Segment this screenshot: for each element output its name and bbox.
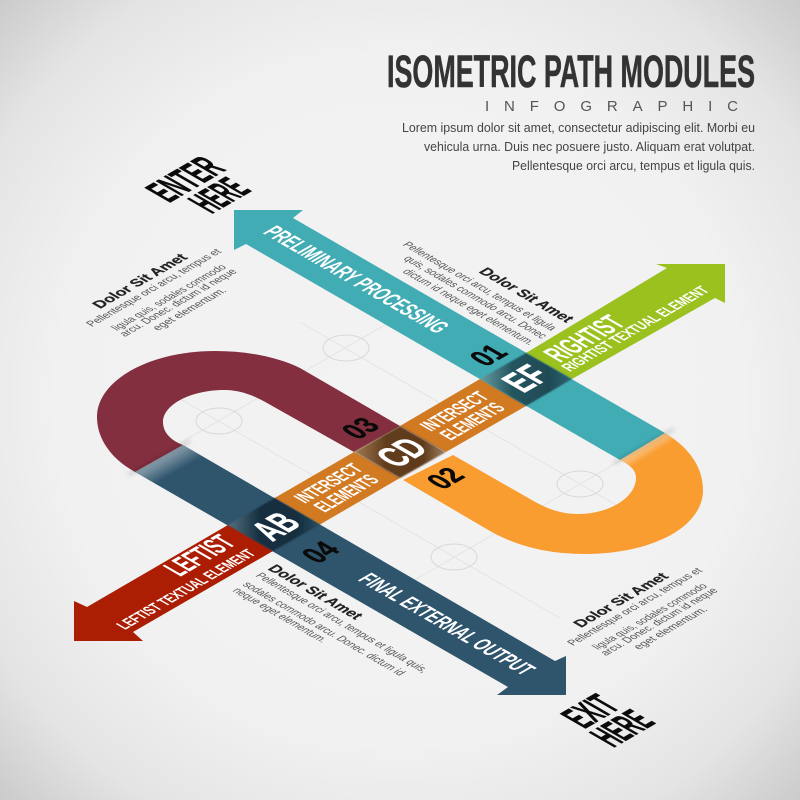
label: final external output: FINAL EXTERNAL OUTPUT: [353, 569, 541, 679]
enter here label: ENTER: [136, 151, 236, 208]
number 04: 04: [294, 536, 348, 568]
maroon curve band 03: [97, 351, 400, 472]
label: rightist: RIGHTIST: [536, 310, 633, 367]
number 03: 03: [334, 413, 387, 444]
text block: upper right: quis, sodales commodo arcu. Donec: [400, 254, 550, 341]
intersect band segment lower: [275, 452, 400, 524]
number 02: 02: [419, 463, 472, 494]
text block: lower right: ligula quis, sodales commodo: [590, 582, 711, 652]
joint shading: maroon to navy: [128, 441, 203, 484]
text block: upper left: eget elementum.: [150, 286, 230, 333]
green right arrow band: [526, 264, 725, 379]
text block: lower right: Pellentesque orci arcu, tempus et: [565, 566, 706, 648]
text block: upper left: Pellentesque orci arcu, tempus et: [84, 247, 225, 329]
teal arrow band 01: [234, 210, 665, 460]
text block: upper left: arcu. Donec. dictum id neque: [117, 267, 240, 339]
CD junction block: [354, 426, 446, 478]
text block: lower left: sodales commodo arcu. Donec. dictum id: [239, 580, 407, 678]
exit here label: HERE: [580, 704, 665, 753]
number 01: 01: [462, 340, 515, 371]
orange curve band 02: [403, 433, 703, 554]
red left arrow band: [74, 525, 273, 641]
intro paragraph: Pellentesque orci arcu, tempus et ligula quis.: [512, 159, 755, 173]
text block: lower right: eget elementum.: [631, 605, 711, 652]
AB junction block: [228, 498, 320, 551]
intro paragraph: vehicula urna. Duis nec posuere justo. Aliquam erat volutpat.: [424, 140, 755, 154]
text block: upper left: Dolor Sit Amet: [89, 251, 192, 311]
label: intersect elements upper: [415, 389, 511, 443]
intro paragraph: [402, 121, 755, 173]
subtitle: INFOGRAPHIC: [485, 98, 738, 115]
label: intersect elements lower: [289, 461, 385, 515]
enter here label: HERE: [179, 172, 261, 219]
text block: lower left: neque eget elementum.: [229, 586, 330, 645]
text block: upper right: dictum id neque eget elementum.: [399, 267, 537, 347]
label: intersect elements upper: INTERSECT: [415, 389, 494, 434]
junction letters AB: AB: [242, 507, 311, 547]
EF junction block: [480, 353, 572, 406]
label: intersect elements lower: INTERSECT: [289, 461, 368, 506]
label: intersect elements upper: ELEMENTS: [435, 400, 511, 443]
enter here label: [136, 151, 261, 219]
text block: lower left: Pellentesque orci arcu, tempus et ligula quis,: [252, 571, 431, 675]
text block: lower left: Dolor Sit Amet: [264, 562, 367, 622]
label: leftist textual element: LEFTIST TEXTUAL ELEMENT: [113, 547, 260, 632]
label: intersect elements lower: ELEMENTS: [309, 472, 385, 515]
text block: upper right: Pellentesque orci arcu, tempus et ligula: [399, 240, 559, 333]
exit here label: EXIT: [551, 689, 630, 734]
joint shading: teal to orange: [614, 429, 677, 467]
text block: upper left: ligula quis, sodales commodo: [109, 263, 230, 333]
exit here label: [551, 689, 665, 753]
label: rightist textual element: RIGHTIST TEXTUAL ELEMENT: [558, 284, 714, 374]
junction letters CD: CD: [367, 432, 438, 473]
label: preliminary processing: PRELIMINARY PROCESSING: [257, 222, 455, 337]
intersect band segment upper: [400, 379, 526, 452]
text block: upper right: Dolor Sit Amet: [475, 265, 578, 325]
junction letters EF: EF: [493, 359, 560, 398]
text block: lower right: arcu. Donec. dictum id neque: [598, 586, 721, 658]
isometric guide grid: [135, 322, 670, 618]
navy arrow band 04: [135, 445, 566, 695]
text block: lower right: Dolor Sit Amet: [570, 570, 673, 630]
intro paragraph: Lorem ipsum dolor sit amet, consectetur adipiscing elit. Morbi eu: [402, 121, 755, 135]
label: leftist: LEFTIST: [156, 530, 243, 581]
